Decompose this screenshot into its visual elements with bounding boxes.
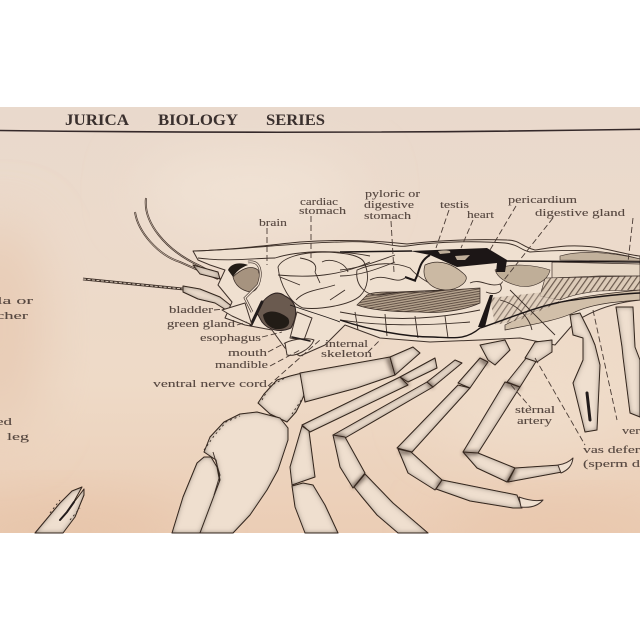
anatomical labels: pericardium xyxy=(508,195,578,206)
heart and dorsal artery xyxy=(340,248,640,327)
leg two xyxy=(333,360,462,533)
anatomical labels: testis xyxy=(440,200,469,211)
body shell xyxy=(193,240,640,356)
walking legs xyxy=(290,307,640,533)
head organs: brain and green gland xyxy=(222,262,314,355)
aged paper background xyxy=(0,107,640,560)
anatomical labels: skeleton xyxy=(321,349,373,360)
series header: JURICA xyxy=(65,112,129,129)
anatomical labels xyxy=(0,189,640,470)
ventral nerve cord xyxy=(290,293,640,338)
second claw at lower left xyxy=(35,487,84,533)
antennae xyxy=(83,198,234,313)
anatomical labels: ver xyxy=(622,426,640,437)
anatomical labels: heart xyxy=(467,210,494,221)
anatomical labels: pyloric or xyxy=(365,189,421,200)
leg three xyxy=(397,358,543,508)
cardiac stomach xyxy=(278,252,370,308)
anatomical labels: sternal xyxy=(515,405,555,416)
leader lines xyxy=(214,206,633,445)
anatomical labels: ventral nerve cord xyxy=(153,379,268,390)
anatomical labels: internal xyxy=(325,339,368,350)
anatomical labels: artery xyxy=(517,416,553,427)
swimmerets xyxy=(570,307,640,432)
anatomical labels: bladder xyxy=(169,305,214,316)
anatomical labels: leg xyxy=(7,432,30,443)
poster photograph xyxy=(0,107,640,534)
crayfish illustration xyxy=(0,189,640,533)
anatomical labels: green gland xyxy=(167,319,236,330)
anatomical labels: stomach xyxy=(299,206,347,217)
gut and muscle band xyxy=(340,255,555,338)
anatomical labels: stomach xyxy=(364,211,412,222)
tail segments xyxy=(490,252,640,330)
anatomical labels: digestive gland xyxy=(535,208,626,219)
series header: SERIES xyxy=(266,112,325,129)
series header: BIOLOGY xyxy=(158,112,238,129)
claw xyxy=(172,373,308,533)
anatomical labels: mandible xyxy=(215,360,268,371)
anatomical labels: digestive xyxy=(364,200,414,211)
anatomical labels: mouth xyxy=(228,348,268,359)
joint shading xyxy=(335,358,520,487)
anatomical labels: esophagus xyxy=(200,333,261,344)
anatomical labels: (sperm d xyxy=(583,459,640,470)
leg four xyxy=(463,340,573,482)
leg one and cheliped arm xyxy=(290,347,437,533)
anatomical labels: brain xyxy=(259,218,288,229)
anatomical labels: cardiac xyxy=(300,197,338,208)
series header xyxy=(0,112,640,132)
anatomical labels: vas defer xyxy=(583,445,640,456)
